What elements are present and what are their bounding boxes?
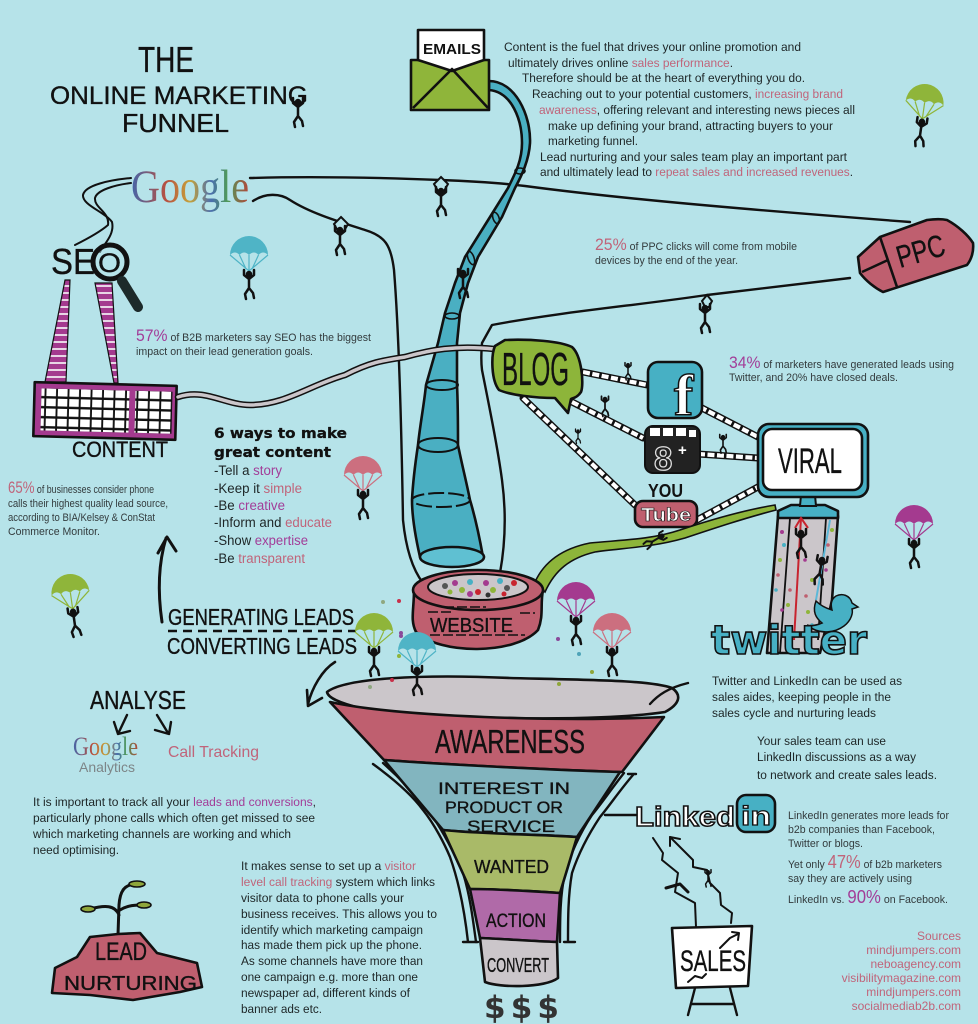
text block: content is the fuel [504,40,855,179]
icon: lead nurturing plant: LEAD [95,938,147,966]
stat: phone calls 65%: Commerce Monitor. [8,526,100,538]
funnel stage: wanted: WANTED [474,857,549,877]
text block: linkedin discussions: Your sales team can use [757,734,886,748]
wires: Google and PPC lines [250,177,910,583]
funnel stage: interest: INTEREST IN [438,779,570,798]
icon: facebook [648,362,702,428]
sources list: socialmediab2b.com [852,999,961,1013]
Google logo: Google [131,161,249,213]
stat: linkedin leads: LinkedIn generates more leads for [788,810,949,822]
funnel rim dots and handle [368,678,688,704]
icon: emails envelope [411,30,489,110]
text block: content is the fuel: Content is the fuel that drives your online promotion and [504,40,801,54]
sources list: visibilitymagazine.com [842,971,961,985]
icon: facebook: f [674,363,694,428]
green path from website to tower [535,505,776,592]
website cylinder: WEBSITE [430,615,513,637]
stat: Twitter 34%: 34% of marketers have generated leads using [729,353,954,372]
icon: youtube: Tube [641,505,691,525]
icon: youtube: YOU [648,481,683,501]
parachutist: green funnel [355,613,393,676]
sources list: Sources [917,929,961,943]
funnel stage: action: ACTION [486,911,546,932]
Google Analytics logo: Google [73,732,138,761]
Google Analytics logo: Analytics [79,759,135,775]
funnel stage: action [470,889,560,942]
text block: content is the fuel: Lead nurturing and your sales team play an important part [540,150,848,164]
text block: six ways list: -Keep it simple [214,481,302,496]
text block: six ways list: great content [214,445,331,461]
website cylinder [413,570,543,649]
stat: PPC 25%: 25% of PPC clicks will come from mobile [595,235,797,254]
parachutist: red website [593,613,631,676]
funnel stage: awareness [330,702,664,772]
text block: visitor level call tracking: banner ads etc. [241,1002,322,1016]
parachutist: green left [49,572,95,639]
icon: lead nurturing plant: NURTURING [64,973,197,995]
icon: twitter bird [807,595,858,632]
stat: linkedin leads [788,810,949,907]
ropes between blog, social networks and viral [523,363,758,520]
arrow: converting leads to funnel [307,662,335,706]
keyboard legs [45,280,118,383]
icon: PPC mouse [858,219,973,292]
funnel stage: interest: PRODUCT OR [445,798,563,817]
sources list [842,929,961,1013]
text block: visitor level call tracking: visitor data to phone calls your [241,891,404,905]
stat: Twitter 34%: Twitter, and 20% have closed deals. [729,372,898,384]
icon: google plus: 8 [654,440,672,477]
text block: visitor level call tracking: It makes sense to set up a visitor [241,859,416,873]
text block: content is the fuel: marketing funnel. [548,134,638,148]
call tracking label: Call Tracking [168,744,259,761]
grey wire from keyboard to blog [178,348,494,405]
stat: Twitter 34% [729,353,954,384]
text block: visitor level call tracking: has made them pick up the phone. [241,938,422,952]
stat: linkedin leads: LinkedIn vs. 90% on Facebook. [788,887,948,907]
analyse label and arrows [90,685,186,734]
LinkedIn logo [605,795,775,832]
text block: six ways list: -Be transparent [214,551,305,566]
icon: PPC mouse: PPC [892,228,949,275]
email tube into the funnel [412,81,530,567]
text block: six ways list [214,426,347,566]
parachutist: red centre [344,456,382,519]
text block: track leads: particularly phone calls which often get missed to see [33,811,315,825]
generating and converting leads labels: CONVERTING LEADS [167,633,357,659]
stat: phone calls 65% [8,478,168,538]
sources list: mindjumpers.com [866,985,961,999]
text block: six ways list: 6 ways to make [214,426,347,442]
SEO with magnifier: O [98,248,121,278]
funnel stand side rails [373,763,636,942]
generating and converting leads labels [167,604,357,659]
LinkedIn logo: in [741,801,771,831]
icon: blog speech bubble: BLOG [502,343,569,395]
text block: visitor level call tracking: identify which marketing campaign [241,923,423,937]
icon: stick figure by title [293,98,303,127]
stat: linkedin leads: Yet only 47% of b2b marketers [788,852,942,872]
text block: visitor level call tracking: newspaper ad, different kinds of [241,986,411,1000]
title: FUNNEL [122,108,229,138]
stat: SEO 57%: 57% of B2B marketers say SEO has the biggest [136,326,372,345]
sources list: neboagency.com [870,957,961,971]
text block: visitor level call tracking: As some channels have more than [241,954,423,968]
icon: viral monitor [758,424,868,506]
SEO with magnifier: SE [51,241,95,282]
text block: six ways list: -Show expertise [214,533,308,548]
stat: PPC 25% [595,235,797,267]
wires: Google to SEO [75,178,131,252]
funnel stage: awareness: AWARENESS [435,723,585,760]
parachutist: green top right [900,82,946,149]
funnel stage: wanted [443,830,577,893]
icon: google plus: + [678,442,687,459]
title [50,39,308,138]
stat: PPC 25%: devices by the end of the year. [595,255,738,267]
funnel stage: convert [480,938,558,986]
Google Analytics logo [73,732,138,775]
arrows: sales up to LinkedIn [653,837,732,927]
climbing wall tower [767,505,838,653]
parachutist: purple right [895,505,933,568]
icon: google plus [645,426,700,477]
stat: SEO 57%: impact on their lead generation goals. [136,346,313,358]
text block: six ways list: -Inform and educate [214,515,332,530]
text block: visitor level call tracking [241,859,437,1016]
stat: linkedin leads: Twitter or blogs. [788,838,863,850]
icon: sales chart board: SALES [680,945,746,978]
text block: track leads: need optimising. [33,843,119,857]
arrow: up to six ways [158,537,176,622]
text block: twitter and linkedin sales aides: sales aides, keeping people in the [712,690,891,704]
title: THE [138,39,194,80]
funnel stage: interest: SERVICE [467,817,555,836]
parachutist: purple website [557,582,595,645]
text block: visitor level call tracking: one campaign e.g. more than one [241,970,418,984]
icon: blog speech bubble [492,340,582,413]
icon: viral monitor: VIRAL [778,442,842,481]
SEO with magnifier [51,241,138,307]
title: ONLINE MARKETING [50,82,308,110]
text block: track leads: It is important to track all your leads and conversions, [33,795,316,809]
text block: six ways list: -Tell a story [214,463,282,478]
icon: emails envelope: EMAILS [423,41,481,58]
LinkedIn logo: Linked [635,801,735,832]
funnel rim [327,677,678,718]
text block: content is the fuel: Reaching out to your potential customers, increasing brand [532,87,843,101]
text block: twitter and linkedin sales aides: sales cycle and nurturing leads [712,706,876,720]
generating and converting leads labels: GENERATING LEADS [168,604,354,630]
text block: content is the fuel: awareness, offering relevant and interesting news pieces all [539,103,855,117]
text block: linkedin discussions: LinkedIn discussions as a way [757,750,917,764]
parachutist: cyan [230,236,268,299]
text block: linkedin discussions: to network and create sales leads. [757,768,937,782]
funnel stage: interest [384,760,620,837]
stat: linkedin leads: say they are actively using [788,873,912,885]
text block: visitor level call tracking: business receives. This allows you to [241,907,437,921]
icon: lead nurturing plant [52,881,202,1000]
text block: twitter and linkedin sales aides: Twitter and LinkedIn can be used as [712,674,902,688]
stat: phone calls 65%: according to BIA/Kelsey & ConStat [8,512,156,524]
text block: content is the fuel: and ultimately lead to repeat sales and increased revenues. [540,165,853,179]
stat: phone calls 65%: 65% of businesses consider phone [8,478,154,497]
parachutist: blue funnel [398,632,436,695]
sources list: mindjumpers.com [866,943,961,957]
text block: track leads: which marketing channels are working and which [32,827,291,841]
twitter wordmark: twitter [711,618,867,664]
icon: keyboard [33,382,177,440]
icon: youtube [635,481,697,527]
text block: track leads [32,795,316,857]
stat: phone calls 65%: calls their highest quality lead source, [8,498,168,510]
text block: content is the fuel: Therefore should be at the heart of everything you do. [522,71,805,85]
content label: CONTENT [72,437,168,462]
text block: content is the fuel: ultimately drives online sales performance. [508,56,733,70]
text block: content is the fuel: make up defining your brand, attracting buyers to your [548,119,833,133]
text block: visitor level call tracking: level call tracking system which links [241,875,435,889]
stat: linkedin leads: b2b companies than Facebook, [788,824,935,836]
confetti around the funnel [381,599,594,674]
analyse label and arrows: ANALYSE [90,685,186,715]
text block: twitter and linkedin sales aides [712,674,902,720]
funnel stage: convert: CONVERT [487,955,549,977]
hanging figures on wires [334,177,712,333]
text block: six ways list: -Be creative [214,498,285,513]
text block: linkedin discussions [757,734,937,782]
icon: sales chart board [672,926,752,1015]
stat: SEO 57% [136,326,372,358]
